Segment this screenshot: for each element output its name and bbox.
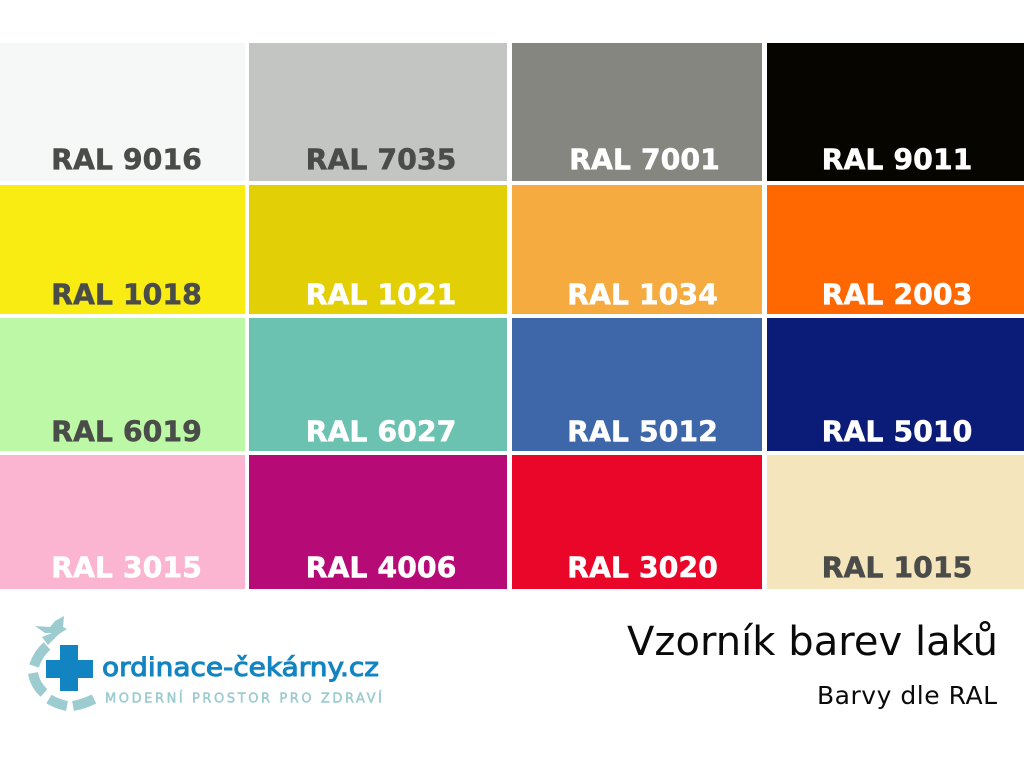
icon: ring segments [33,646,94,706]
swatch: RAL 6019: RAL 6019 [51,416,202,448]
swatch: RAL 4006: RAL 4006 [306,552,456,584]
icon: bird [35,616,67,645]
swatch: RAL 6019 [0,318,245,451]
swatch: RAL 6027 [249,318,507,451]
swatch: RAL 1018 [0,185,245,314]
swatch: RAL 1034 [512,185,762,314]
logo tagline: MODERNÍ PROSTOR PRO ZDRAVÍ [105,690,382,706]
swatch: RAL 1021 [249,185,507,314]
swatch: RAL 5012 [512,318,762,451]
swatch: RAL 5012: RAL 5012 [567,416,718,448]
logo: ordinace-čekárny.cz [33,616,382,706]
swatch: RAL 5010 [767,318,1024,451]
swatch: RAL 3020 [512,455,762,589]
swatch: RAL 6027: RAL 6027 [306,416,456,448]
swatch: RAL 9011: RAL 9011 [822,144,972,176]
swatch: RAL 1015: RAL 1015 [822,552,972,584]
logo wordmark: ordinace-čekárny.cz [102,653,379,683]
swatch: RAL 9016: RAL 9016 [51,144,202,176]
swatch: RAL 1034: RAL 1034 [567,278,718,312]
swatch: RAL 2003 [767,185,1024,314]
swatch: RAL 2003: RAL 2003 [822,278,972,312]
swatch: RAL 3020: RAL 3020 [567,552,718,584]
swatch: RAL 7035 [249,43,507,181]
swatch: RAL 1021: RAL 1021 [306,278,456,312]
swatch: RAL 1018: RAL 1018 [51,278,202,312]
swatch: RAL 7001: RAL 7001 [569,144,720,176]
swatch: RAL 1015 [767,455,1024,589]
swatch: RAL 4006 [249,455,507,589]
swatch: RAL 9016 [0,43,245,181]
title: Vzorník barev laků [627,619,998,665]
icon: medical cross [46,645,93,691]
swatch: RAL 7035: RAL 7035 [306,144,456,176]
swatch: RAL 3015: RAL 3015 [51,552,202,584]
swatch: RAL 9011 [767,43,1024,181]
swatch: RAL 7001 [512,43,762,181]
swatch: RAL 3015 [0,455,245,589]
subtitle: Barvy dle RAL [817,681,997,710]
swatch: RAL 5010: RAL 5010 [822,416,972,448]
